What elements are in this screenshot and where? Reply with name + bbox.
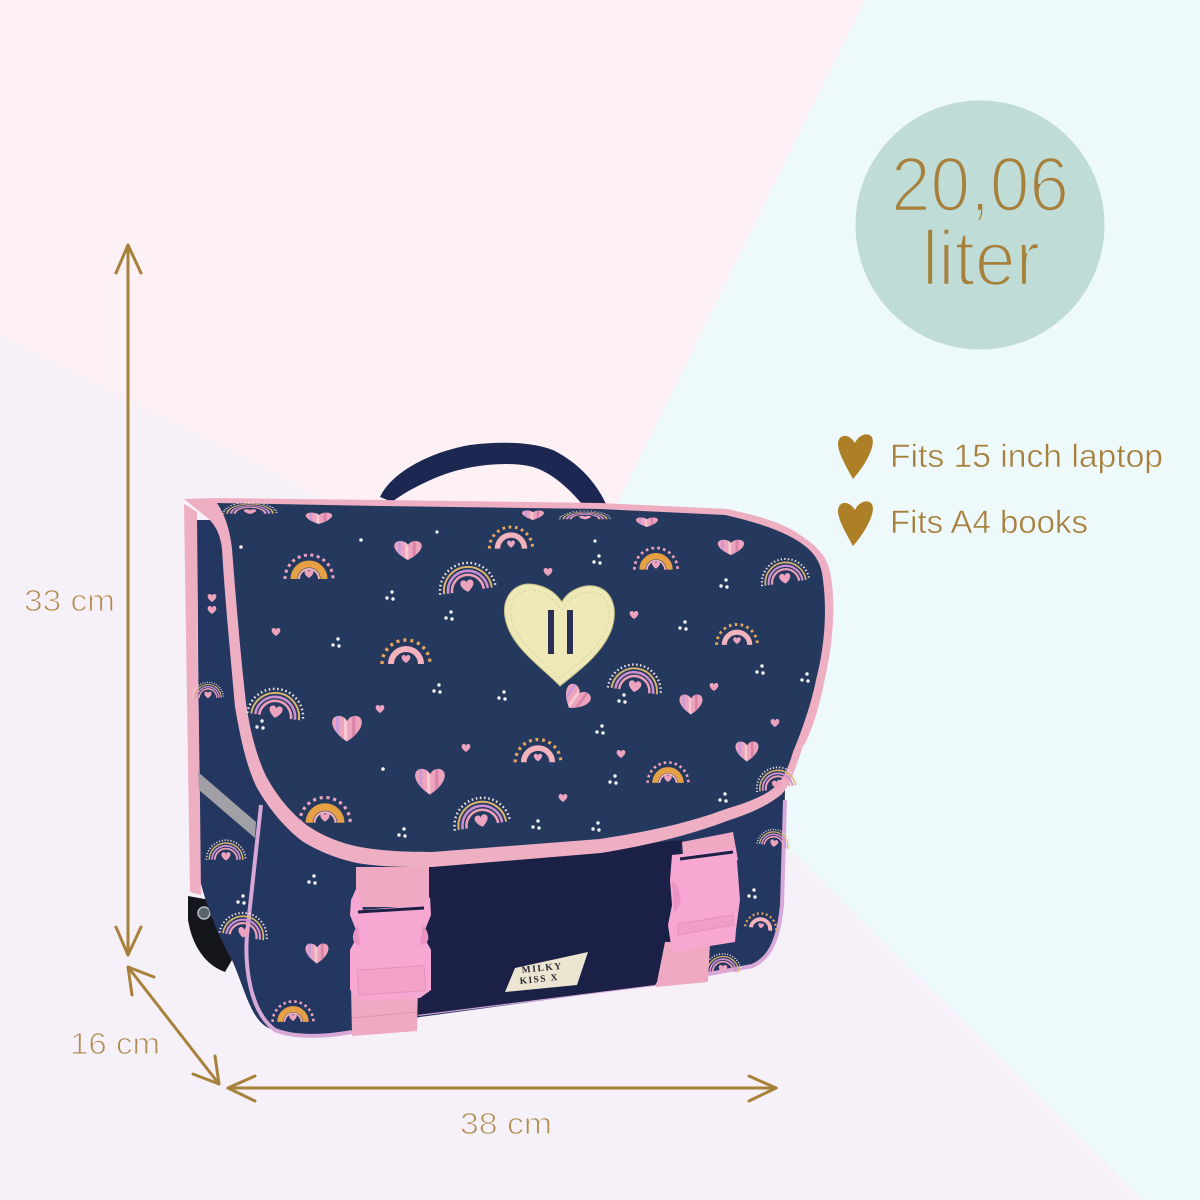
left buckle [350,887,431,1001]
flap print [223,502,810,838]
volume badge: liter [922,214,1040,302]
school bag [184,443,833,1036]
reflective strip [198,772,256,838]
arrow: height [116,245,141,955]
feature: fits 15 inch laptop: Fits 15 inch laptop [890,438,1163,474]
bag handle [380,443,606,504]
feature: fits A4 books: Fits A4 books [890,504,1088,540]
feature: fits 15 inch laptop [838,434,1163,479]
icon: gold heart [838,501,873,546]
right buckle [668,848,740,952]
arrow: width [228,1076,776,1101]
background: mint facet [560,0,1200,1200]
background: lavender facet [0,335,1150,1200]
label: width: 38 cm [460,1106,552,1141]
black foot [188,896,232,972]
side pink binding [184,504,201,895]
center dark panel [417,840,682,1015]
label: depth: 16 cm [70,1026,160,1061]
brand label: MILKY [521,962,563,976]
rivet [198,907,210,919]
bag body [197,520,785,1036]
icon: gold heart [838,434,873,479]
side and body print [193,594,793,1022]
piping [246,800,785,1036]
arrow: depth [128,967,219,1084]
small striped heart below patch [557,679,595,717]
brand label [505,952,588,992]
left strap [351,867,429,1036]
feature: fits A4 books [838,501,1088,546]
flap [184,498,833,867]
right strap [656,832,738,987]
brand label: KISS X [519,973,559,987]
gold heart patch [504,584,614,686]
label: height: 33 cm [24,583,115,618]
volume badge: 20,06 [891,142,1069,228]
volume badge [856,100,1104,350]
